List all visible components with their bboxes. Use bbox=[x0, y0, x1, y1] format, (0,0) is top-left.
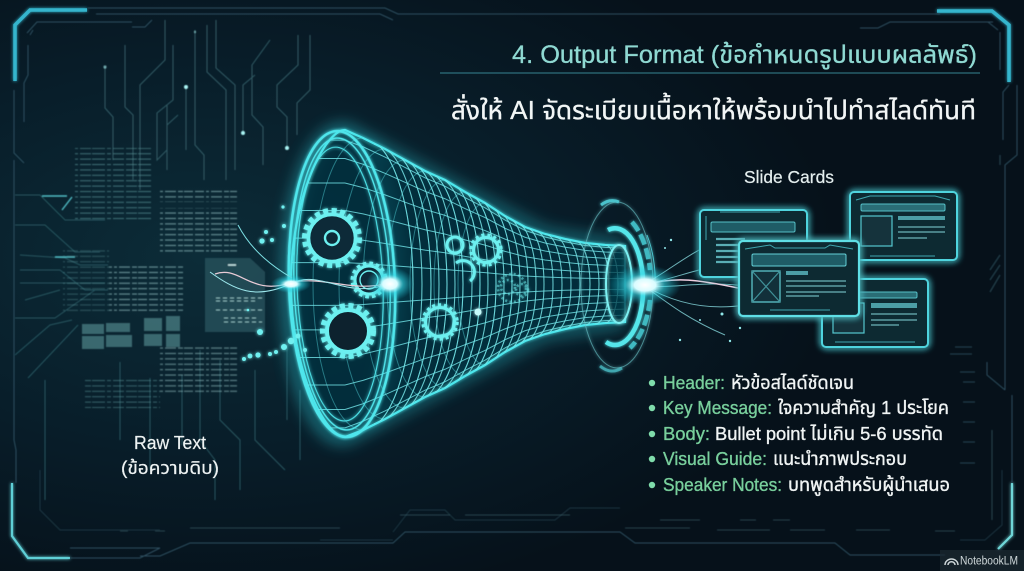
funnel throat rim bbox=[606, 245, 632, 323]
gear: large top bbox=[304, 210, 360, 266]
light flare: funnel left bbox=[271, 267, 414, 301]
bullet: key message: Key Message: bbox=[663, 397, 772, 418]
node dots: top circuits bbox=[103, 31, 289, 150]
slide card: center front bbox=[739, 241, 859, 316]
table fragment bbox=[82, 316, 180, 349]
label: raw text: (ข้อความดิบ) bbox=[121, 458, 219, 478]
icon: NotebookLM logo bbox=[945, 559, 958, 565]
bullet: speaker notes: Speaker Notes: bbox=[663, 474, 782, 495]
circuit traces: top bbox=[103, 20, 310, 190]
sparkle bbox=[474, 308, 482, 316]
icon: wireframe funnel bbox=[280, 129, 632, 439]
subtitle: สั่งให้ AI จัดระเบียบเนื้อหาให้พร้อมนำไปทำสไลด์ทันที bbox=[451, 92, 976, 125]
funnel grid bbox=[280, 138, 625, 430]
gear: large bottom bbox=[322, 306, 374, 356]
slide card: bottom right bbox=[822, 279, 928, 347]
text block: dim lower bbox=[85, 378, 160, 408]
dissolving gear cluster bbox=[498, 274, 528, 302]
icon: output ring bbox=[581, 201, 655, 371]
bullet: visual guide: Visual Guide: bbox=[663, 448, 767, 469]
text block: bright center bbox=[109, 263, 183, 311]
data streams and particles: left bbox=[210, 205, 388, 361]
bullet: body: Body: bbox=[663, 423, 710, 444]
frame corner: bottom left bbox=[12, 483, 70, 558]
circuit traces: left and bottom bbox=[15, 195, 300, 500]
label: raw text bbox=[121, 433, 219, 478]
text block: lower bbox=[158, 347, 237, 395]
watermark: NotebookLM: NotebookLM bbox=[960, 556, 1018, 568]
frame corner: bottom right bbox=[998, 483, 1012, 549]
bullet: header: หัวข้อสไลด์ชัดเจน bbox=[731, 372, 854, 393]
bullet: speaker notes: บทพูดสำหรับผู้นำเสนอ bbox=[788, 474, 950, 497]
icon: gears bbox=[304, 210, 528, 356]
bullet: body: Bullet point ไม่เกิน 5-6 บรรทัด bbox=[715, 423, 943, 444]
light flare: output bbox=[609, 265, 681, 305]
text block: bright middle bbox=[158, 208, 237, 254]
slide card: bullets (back left) bbox=[700, 210, 807, 277]
bullet: visual guide: แนะนำภาพประกอบ bbox=[773, 448, 907, 469]
frame corner: top left bbox=[15, 10, 87, 81]
bullet: speaker notes bbox=[649, 474, 950, 497]
right side tick marks bbox=[950, 155, 1000, 463]
bottom tiny HUD readouts bbox=[120, 430, 992, 531]
gear: center bbox=[352, 264, 386, 296]
data streams: right bbox=[643, 239, 745, 342]
document page icon bbox=[205, 258, 265, 332]
frame corner: top right bbox=[937, 11, 1009, 82]
slide cards bbox=[700, 192, 957, 347]
slide card: top right bbox=[850, 192, 957, 260]
icon: funnel halo bbox=[288, 130, 625, 438]
label: slide cards: Slide Cards bbox=[744, 167, 834, 187]
text block: bright upper bbox=[158, 188, 237, 202]
bullet: header: Header: bbox=[663, 372, 725, 393]
watermark: NotebookLM bbox=[940, 550, 1024, 571]
text block: dim top bbox=[75, 148, 152, 222]
funnel body bbox=[291, 130, 625, 437]
label: raw text: Raw Text bbox=[134, 433, 206, 453]
faint inner frame lines bbox=[40, 470, 1002, 540]
funnel mouth rim bbox=[284, 129, 400, 439]
bullet: header bbox=[649, 372, 854, 393]
title underline bbox=[440, 72, 980, 74]
text block: dim left bbox=[63, 248, 109, 314]
bullet: key message: ใจความสำคัญ 1 ประโยค bbox=[778, 397, 949, 418]
gear: lower small bbox=[423, 305, 457, 339]
bullet list bbox=[649, 372, 950, 497]
bullet: visual guide bbox=[649, 448, 907, 469]
title: 4. Output Format (ข้อกำหนดรูปแบบผลลัพธ์) bbox=[512, 41, 977, 70]
bullet: key message bbox=[649, 397, 949, 418]
raw text documents bbox=[63, 148, 265, 408]
gear: small pair bbox=[447, 235, 501, 281]
